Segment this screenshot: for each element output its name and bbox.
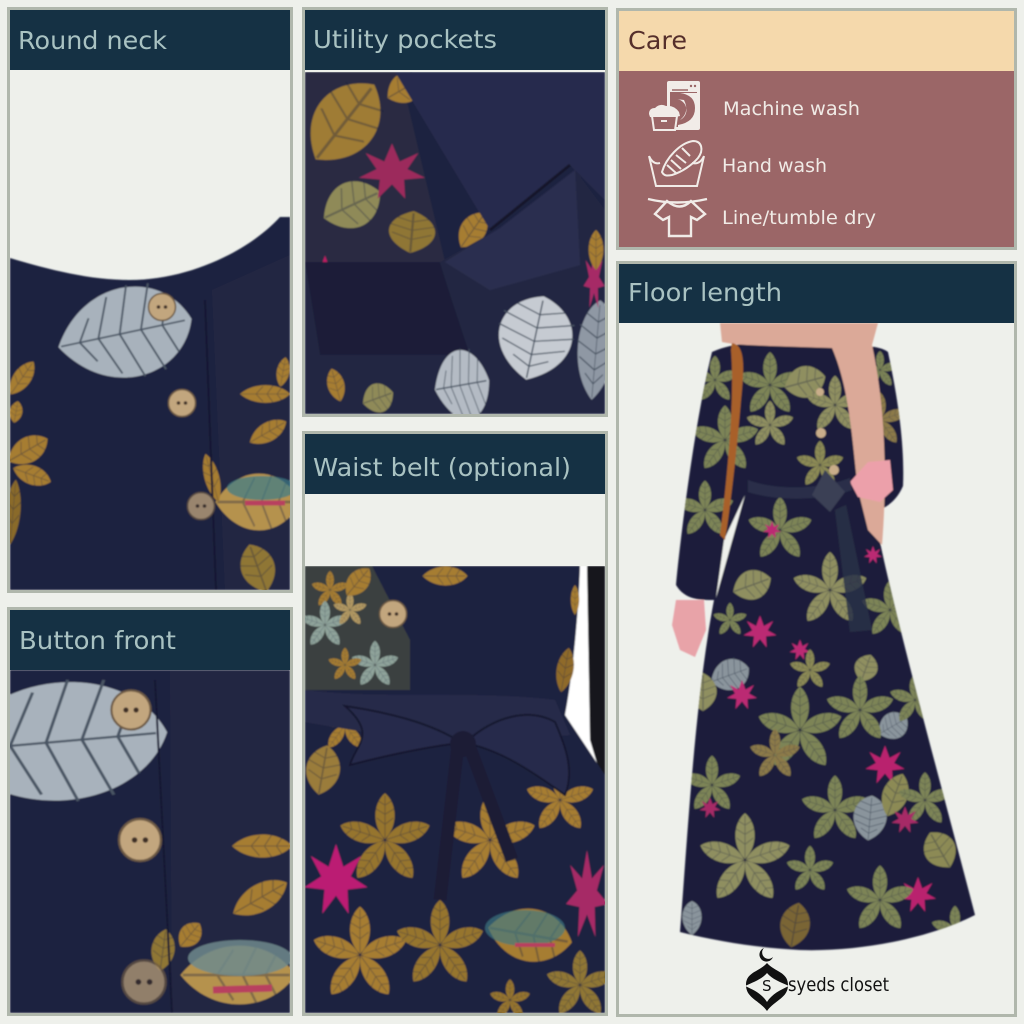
hand right xyxy=(850,460,893,502)
icon: line dry shirt xyxy=(648,199,707,236)
photo: neckline close-up xyxy=(2,217,300,597)
heading xyxy=(10,10,290,70)
icon: hand wash xyxy=(649,141,704,186)
panel: floor length xyxy=(618,262,1016,1016)
heading: Care xyxy=(628,26,687,55)
heading: Button front xyxy=(19,626,176,655)
photo: waist belt close-up xyxy=(300,562,615,1019)
photo: buttons close-up xyxy=(0,670,296,1013)
gap between sleeve and skirt xyxy=(716,495,745,598)
dress body xyxy=(675,344,976,952)
shoulder strap xyxy=(720,343,743,540)
photo: full dress xyxy=(660,323,990,960)
icon: machine wash xyxy=(649,81,700,130)
photo: pocket close-up xyxy=(305,72,605,414)
heading xyxy=(619,11,1014,71)
hijab xyxy=(720,323,885,545)
logo lettering: S xyxy=(762,977,772,995)
heading xyxy=(10,610,290,670)
belt xyxy=(748,478,852,499)
buttons xyxy=(816,388,839,475)
text: machine wash: Machine wash xyxy=(723,98,860,120)
text: hand wash: Hand wash xyxy=(722,155,827,177)
panel: round neck xyxy=(2,8,300,597)
heading xyxy=(305,434,605,494)
hand left xyxy=(672,600,706,657)
heading: Floor length xyxy=(628,278,782,307)
heading: Utility pockets xyxy=(313,25,497,54)
logo xyxy=(745,948,889,1011)
text: line dry: Line/tumble dry xyxy=(722,207,876,229)
heading xyxy=(305,10,605,70)
panel: care xyxy=(618,10,1016,248)
panel: utility pockets xyxy=(291,8,619,425)
heading xyxy=(619,264,1014,323)
heading: Waist belt (optional) xyxy=(313,453,571,482)
panel: button front xyxy=(0,608,296,1014)
logo lettering: syeds closet xyxy=(788,974,889,996)
heading: Round neck xyxy=(18,26,168,55)
panel: waist belt xyxy=(300,432,615,1019)
